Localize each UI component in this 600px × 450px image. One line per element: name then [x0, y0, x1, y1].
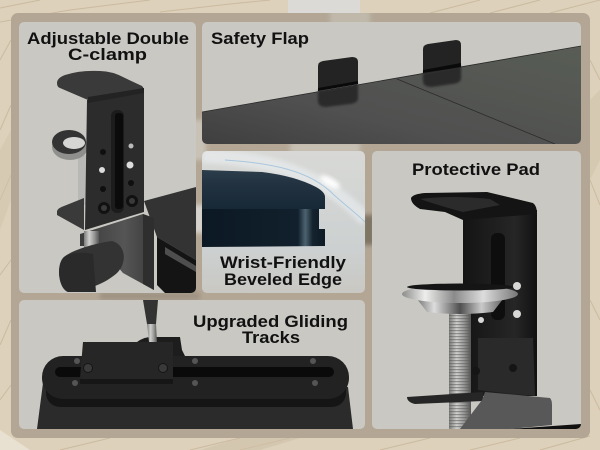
carriage bolts: [84, 364, 168, 372]
panel: wrist-friendly beveled edge: [202, 151, 366, 293]
illustration: gliding track: [37, 300, 353, 429]
flap 2: [423, 40, 461, 73]
slot: [491, 233, 505, 320]
heading: upgraded gliding tracks: Tracks: [242, 328, 300, 347]
bottom bracket: [460, 392, 552, 429]
edge profile upper: [202, 170, 325, 209]
bottom plate: [407, 392, 483, 404]
adjustment holes: [99, 144, 134, 192]
heading: adjustable double c-clamp: [27, 29, 189, 64]
vertical bracket: [463, 210, 537, 396]
screwdriver: [143, 300, 158, 342]
flap 1: [318, 57, 358, 91]
desk post behind panels: [288, 0, 360, 14]
knob: [59, 231, 124, 292]
heading: wrist-friendly beveled edge: [220, 253, 347, 289]
top plate: [411, 192, 537, 220]
track shadow: [46, 375, 346, 407]
heading: adjustable double c-clamp: Adjustable Double: [27, 29, 189, 48]
track rail: [42, 356, 349, 399]
heading: adjustable double c-clamp: C-clamp: [68, 45, 147, 64]
holes: [478, 282, 521, 323]
edge profile lower: [202, 209, 325, 247]
rear carriage: [137, 337, 185, 356]
desk panel edge: [144, 187, 196, 260]
desk edge: [510, 424, 581, 429]
heading: upgraded gliding tracks: Upgraded Gliding: [193, 312, 348, 331]
panel: upgraded gliding tracks: [19, 300, 365, 429]
desk seam: [397, 79, 555, 144]
desk surface: [202, 46, 581, 144]
lower clamp plate: [57, 198, 84, 230]
heading: upgraded gliding tracks: [193, 312, 348, 347]
vertical bracket: [85, 88, 144, 230]
heading: protective pad: Protective Pad: [412, 160, 540, 179]
washer: [52, 130, 88, 205]
rail screws: [72, 358, 318, 386]
desk surface: [37, 383, 353, 429]
heading: wrist-friendly beveled edge: Beveled Edge: [224, 270, 342, 289]
illustration: desk with flaps: [202, 40, 581, 144]
panel: adjustable double C-clamp: [19, 22, 196, 293]
top clamp plate: [57, 71, 144, 100]
illustration: C-clamp: [52, 71, 196, 293]
blue light glow: [202, 156, 366, 222]
steel washer: [402, 284, 518, 314]
carriage plate: [80, 342, 173, 384]
lower bracket block: [478, 338, 535, 396]
adjustment slot: [111, 110, 124, 213]
illustration: beveled edge: [202, 156, 366, 247]
flap reflections: [318, 66, 461, 107]
bolts: [98, 195, 138, 214]
illustration: clamp with protective pad: [402, 192, 581, 429]
heading: wrist-friendly beveled edge: Wrist-Friendly: [220, 253, 347, 272]
threaded screw: [449, 308, 471, 429]
panel: protective pad: [372, 151, 581, 429]
rail slot: [55, 367, 334, 377]
panel: safety flap: [202, 22, 581, 144]
bracket block: [80, 214, 154, 290]
heading: safety flap: Safety Flap: [211, 29, 309, 48]
